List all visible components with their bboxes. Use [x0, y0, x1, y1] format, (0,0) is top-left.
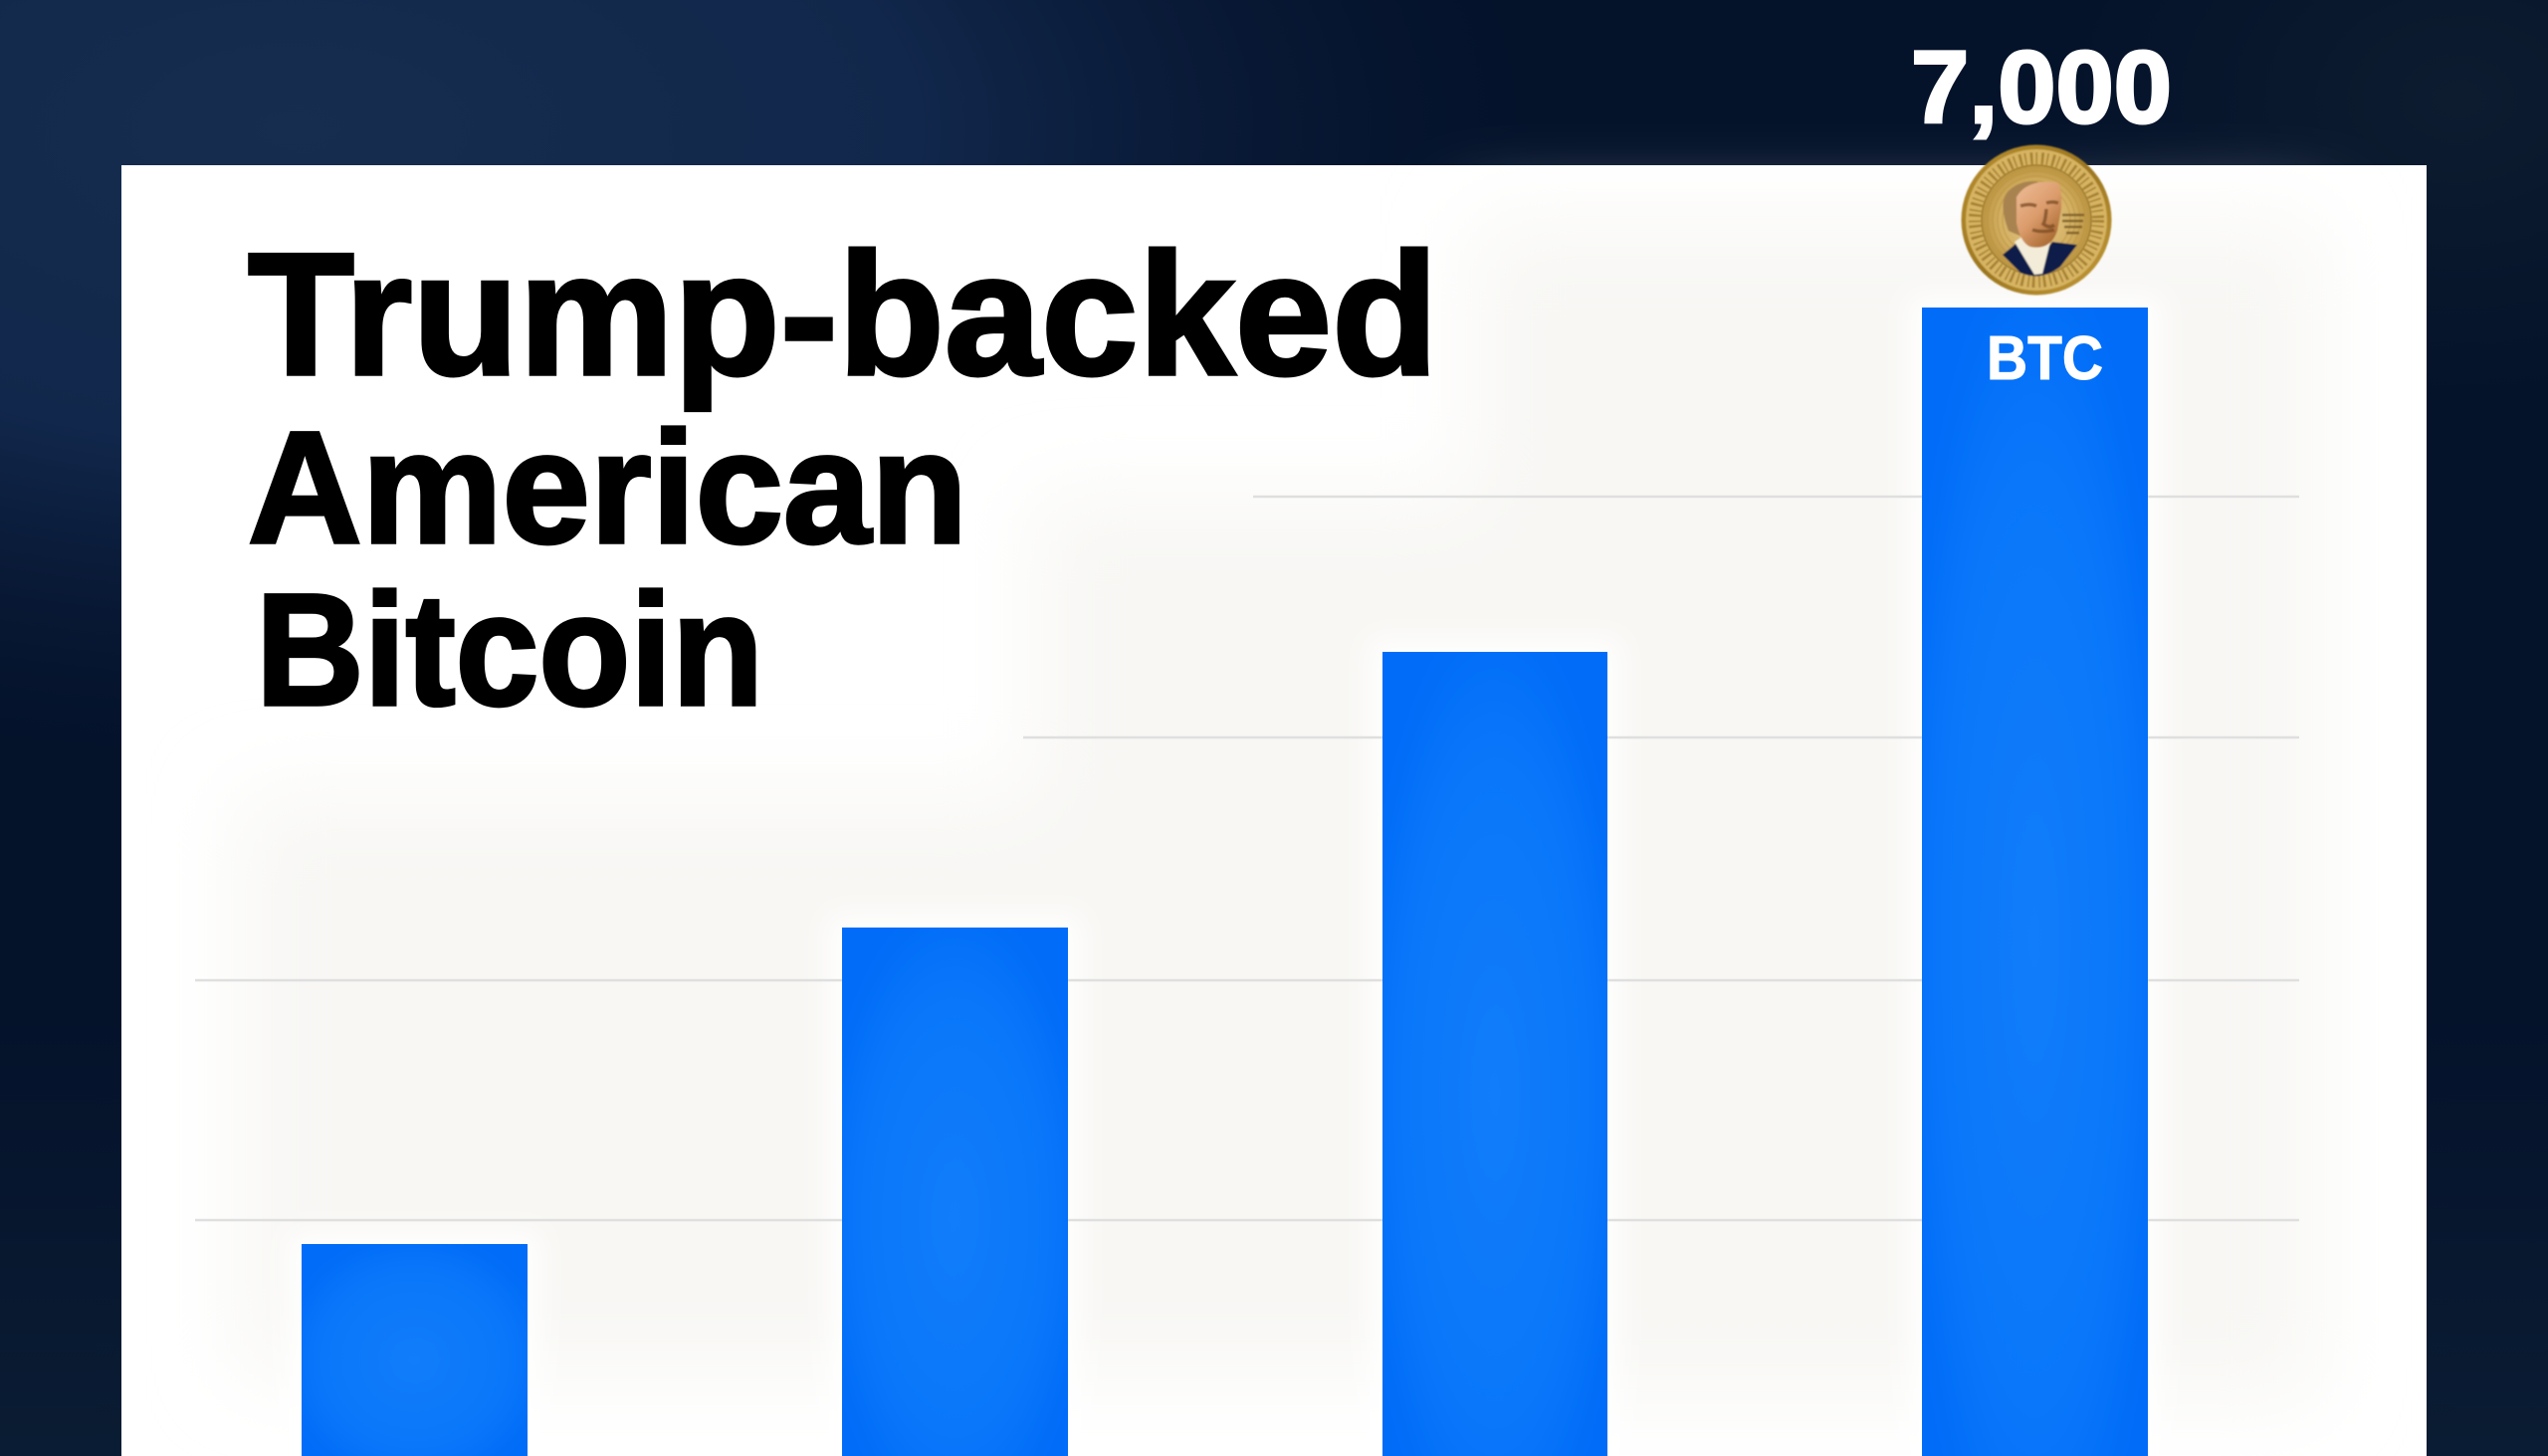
title: Trump-backed — [248, 218, 1438, 412]
coin portrait: shirt — [2015, 234, 2050, 275]
bar 1 — [302, 1244, 528, 1456]
title: Bitcoin — [256, 560, 763, 738]
bar chart — [302, 308, 2148, 1456]
bar 3 — [1382, 652, 1607, 1456]
bar halos — [289, 296, 2161, 1456]
coin portrait: face — [2017, 182, 2061, 248]
title — [248, 218, 1438, 738]
coin portrait: hair — [2003, 181, 2038, 237]
title: American — [248, 398, 967, 576]
value label: 7,000: 7,000 — [1911, 30, 2172, 144]
bar label: BTC: BTC — [1987, 324, 2103, 393]
gridlines — [195, 497, 2299, 1220]
bar 2 — [842, 928, 1068, 1456]
icon: gold coin with portrait — [1961, 145, 2112, 295]
coin portrait: features — [2020, 202, 2058, 231]
coin right emblem — [2062, 215, 2084, 233]
bar 4 — [1922, 308, 2148, 1456]
coin portrait: suit — [2003, 240, 2077, 276]
